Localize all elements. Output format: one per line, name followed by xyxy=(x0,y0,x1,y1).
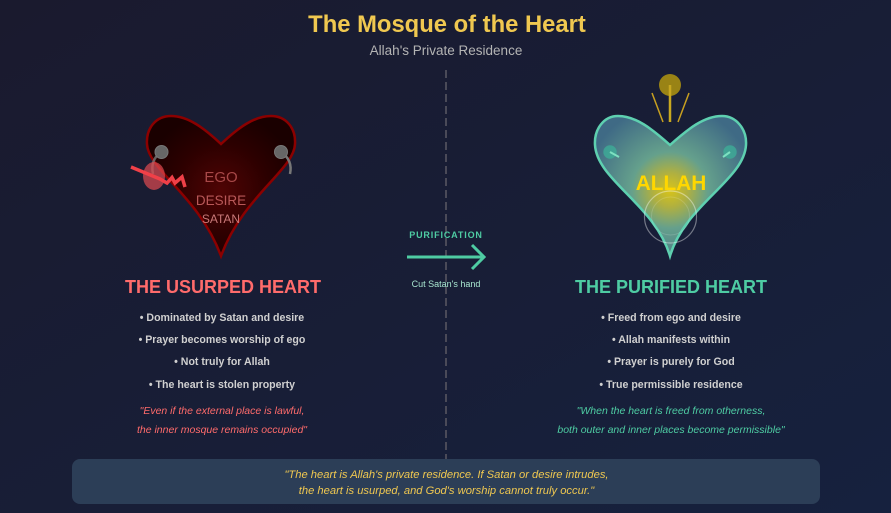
arrow caption: Cut Satan's hand xyxy=(412,279,480,289)
callout: bottom quote xyxy=(72,459,820,504)
list: usurped traits: • The heart is stolen property xyxy=(149,379,295,391)
left hand of heart xyxy=(152,146,168,174)
list: purified traits: • Allah manifests within xyxy=(612,334,730,346)
list: purified traits: • True permissible residence xyxy=(599,379,743,391)
panel: purified heart xyxy=(595,74,746,256)
list: usurped traits: • Prayer becomes worship of ego xyxy=(139,334,306,346)
list: usurped traits: • Not truly for Allah xyxy=(174,356,270,368)
heading: the purified heart: THE PURIFIED HEART xyxy=(575,277,767,297)
callout text: the heart is usurped, and God's worship cannot truly occur." xyxy=(299,485,595,497)
concentric circles xyxy=(644,191,696,243)
quote: purified: both outer and inner places become permissible" xyxy=(557,424,786,436)
heart word: satan: SATAN xyxy=(202,212,240,226)
panel: usurped heart text xyxy=(125,277,321,436)
quote: usurped: the inner mosque remains occupied" xyxy=(137,424,308,436)
list: usurped traits: • Dominated by Satan and desire xyxy=(140,312,304,324)
quote: usurped: "Even if the external place is lawful, xyxy=(140,405,304,417)
subtitle: Allah's Private Residence xyxy=(370,43,522,58)
heart word: desire: DESIRE xyxy=(196,193,246,208)
arrow shape xyxy=(407,245,484,269)
list: purified traits xyxy=(599,312,743,391)
heading: the usurped heart: THE USURPED HEART xyxy=(125,277,321,297)
list: usurped traits xyxy=(139,312,306,391)
panel: usurped heart xyxy=(131,116,295,256)
title: The Mosque of the Heart xyxy=(308,11,586,38)
heart word: ego: EGO xyxy=(204,169,238,186)
center divider xyxy=(445,70,447,460)
icon: dark heart xyxy=(147,116,295,256)
icon: satan claw xyxy=(131,162,185,190)
quote: usurped xyxy=(137,405,308,436)
right hand of heart xyxy=(274,146,291,174)
right leaf xyxy=(723,145,737,159)
panel: purified heart text xyxy=(557,277,786,436)
arrow label: PURIFICATION xyxy=(409,230,483,240)
word: allah: ALLAH xyxy=(636,172,706,195)
arrow: purification xyxy=(407,230,484,289)
list: purified traits: • Freed from ego and desire xyxy=(601,312,741,324)
left leaf xyxy=(603,145,619,159)
callout text xyxy=(284,469,609,497)
icon: light rays xyxy=(652,74,689,122)
quote: purified xyxy=(557,405,786,436)
quote: purified: "When the heart is freed from otherness, xyxy=(577,405,765,417)
callout text: "The heart is Allah's private residence. If Satan or desire intrudes, xyxy=(284,469,609,481)
icon: luminous heart xyxy=(595,116,746,256)
list: purified traits: • Prayer is purely for God xyxy=(607,356,735,368)
